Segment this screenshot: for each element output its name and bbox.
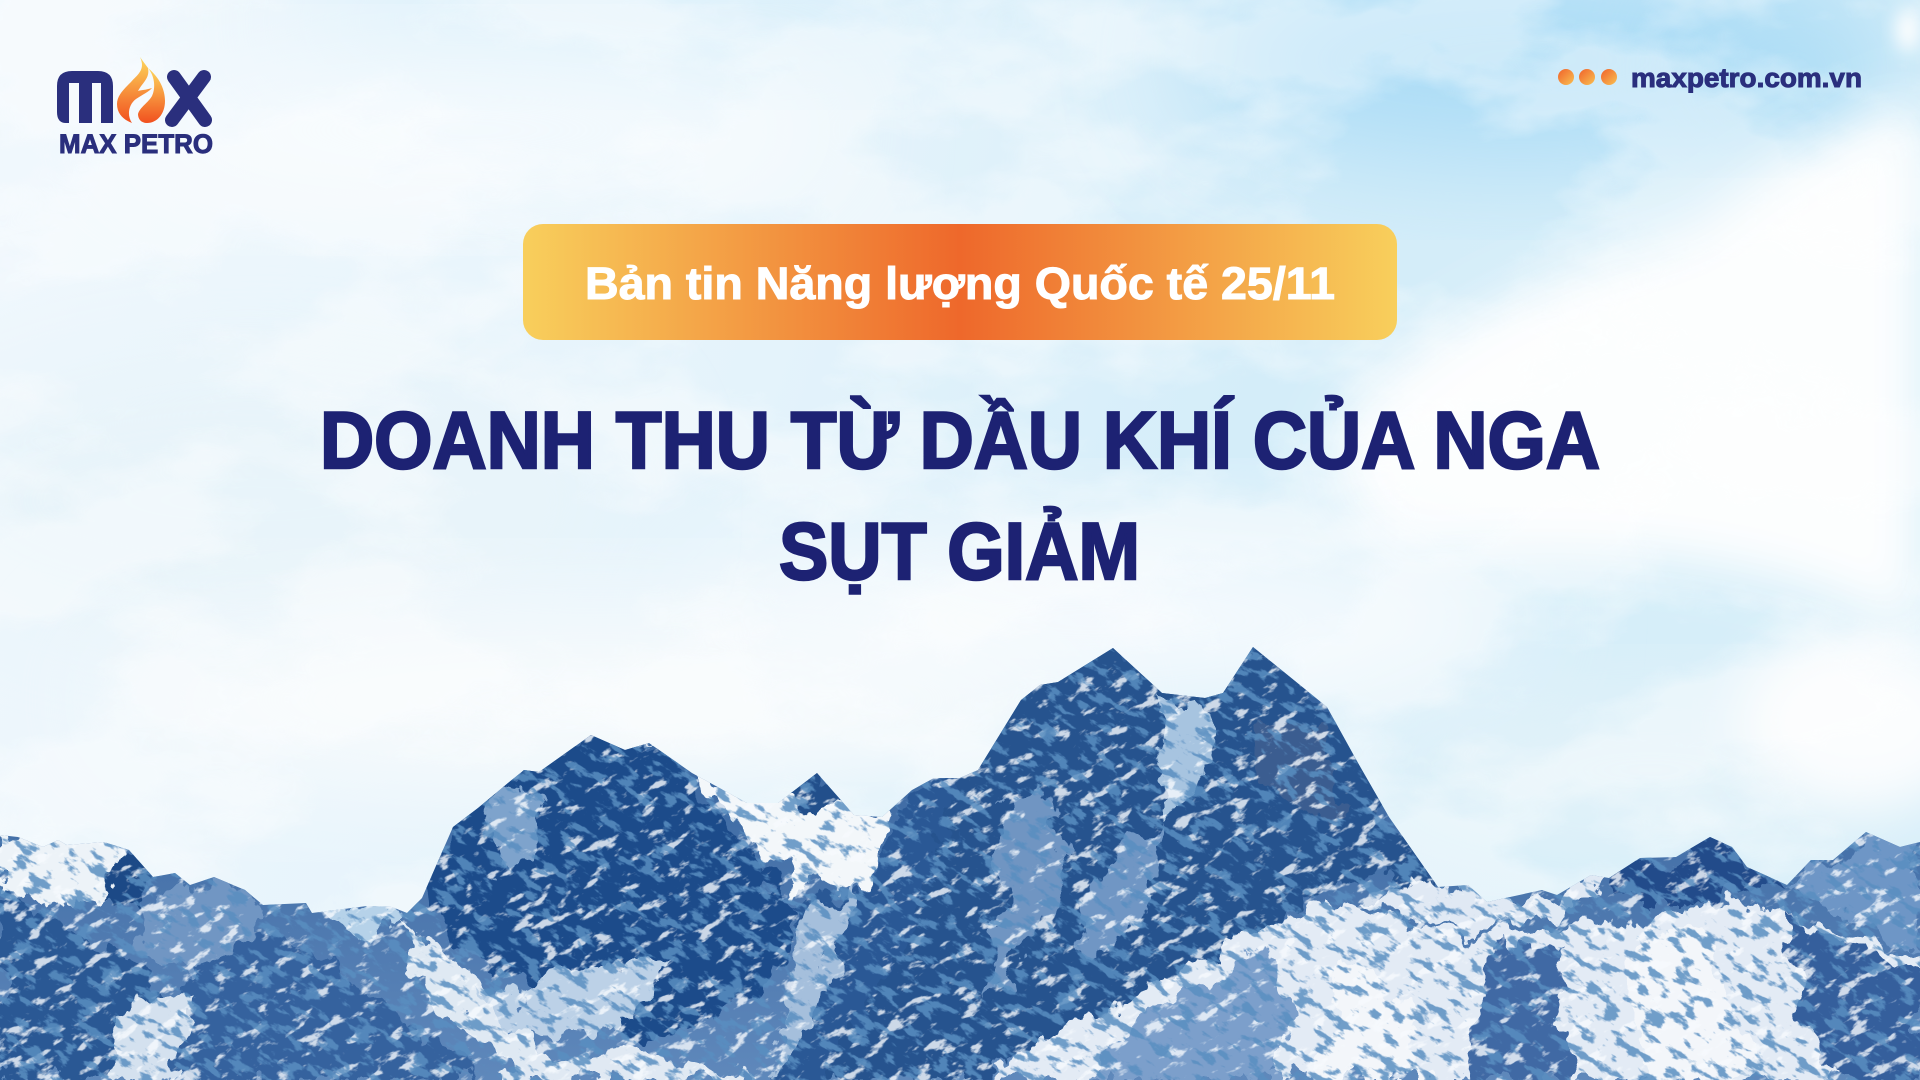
logo: Max Petro xyxy=(57,57,213,159)
mountains xyxy=(0,640,1920,1080)
logo mark: flame xyxy=(117,57,165,123)
logo mark: letter X xyxy=(172,77,205,120)
logo wordmark: MAX PETRO xyxy=(59,129,213,159)
rock and snow regions xyxy=(0,640,1920,1080)
left range xyxy=(0,830,540,1080)
title: DOANH THU TỪ DẦU KHÍ CỦA NGA xyxy=(320,395,1600,486)
badge: bulletin date: Bản tin Năng lượng Quốc tế 25/11 xyxy=(585,258,1335,309)
front snow ridges xyxy=(500,825,1920,1080)
rock and snow texture xyxy=(0,640,1920,1080)
website link with dots: maxpetro.com.vn xyxy=(1631,63,1862,93)
badge: bulletin date xyxy=(523,224,1397,340)
twin peaks xyxy=(820,640,1445,1080)
logo mark: letter M xyxy=(57,71,113,123)
central massif xyxy=(422,725,960,1080)
title: SỤT GIẢM xyxy=(779,506,1140,597)
title xyxy=(320,395,1600,597)
